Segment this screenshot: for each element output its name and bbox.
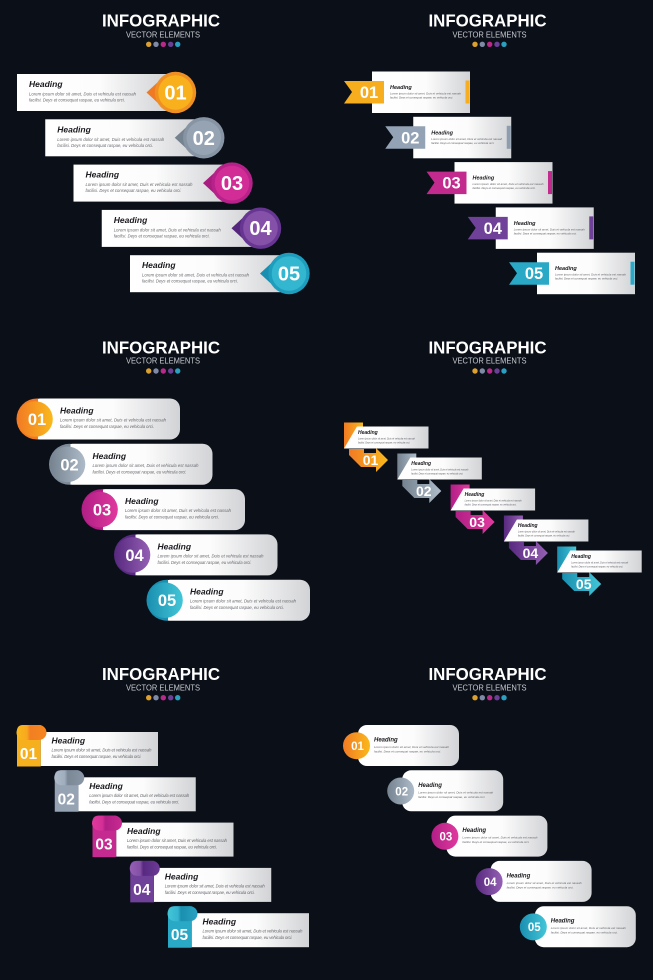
row 05: facilisi. Deys et consequat raspae, eu vehicula orci.	[555, 277, 618, 281]
row 05: 05	[576, 576, 592, 592]
row 04: Lorem ipsum dolor sit amet, Duis et vehicula est nassah	[518, 530, 576, 534]
row 02: facilisi. Deys et consequat raspae, eu vehicula orci.	[89, 799, 179, 804]
row 02: facilisi. Deys et consequat raspae, eu vehicula orci.	[411, 472, 464, 476]
panel 5 title: VECTOR ELEMENTS	[126, 682, 200, 692]
row 04: facilisi. Deys et consequat raspae, eu vehicula orci.	[518, 534, 570, 538]
row 03: facilisi. Deys et consequat raspae, eu vehicula orci.	[472, 186, 536, 190]
row 02: Lorem ipsum dolor sit amet, Duis et vehicula est nassah	[418, 790, 494, 794]
row 04	[468, 207, 594, 249]
row 03	[451, 484, 535, 534]
row 02: Heading	[89, 781, 124, 791]
row 03: facilisi. Deys et consequat raspae, eu vehicula orci.	[125, 515, 219, 520]
row 01	[17, 72, 196, 113]
row 04: 04	[523, 545, 538, 561]
row 02: facilisi. Deys et consequat raspae, eu vehicula orci.	[92, 469, 186, 474]
row 05: Heading	[551, 919, 575, 925]
row 01: Heading	[358, 430, 378, 436]
row 04: Lorem ipsum dolor sit amet, Duis et vehicula est nassah	[165, 883, 265, 888]
row 01: facilisi. Deys et consequat raspae, eu vehicula orci.	[52, 754, 142, 759]
row 05: Lorem ipsum dolor sit amet, Duis et vehicula est nassah	[571, 562, 629, 564]
row 01: Heading	[52, 736, 86, 746]
row 01: facilisi. Deys et consequat raspae, eu vehicula orci.	[29, 98, 125, 102]
row 02: 02	[416, 483, 432, 499]
row 01: Heading	[390, 85, 412, 91]
row 02: Lorem ipsum dolor sit amet, Duis et vehicula est nassah	[89, 793, 190, 798]
row 04	[102, 208, 281, 249]
panel 4: arrow list	[344, 337, 642, 596]
panel 1: teardrop list	[17, 11, 310, 294]
row 01: Lorem ipsum dolor sit amet, Duis et vehicula est nassah	[358, 438, 416, 440]
row 01: Heading	[29, 79, 63, 89]
row 05: Lorem ipsum dolor sit amet, Duis et vehicula est nassah	[190, 599, 297, 604]
row 02: Heading	[431, 130, 454, 136]
row 03	[82, 489, 245, 530]
row 02	[45, 117, 224, 158]
panel 6: rounded card list	[343, 664, 636, 947]
row 01: 01	[360, 84, 378, 102]
row 01: facilisi. Deys et consequat raspae, eu vehicula orci.	[60, 424, 154, 429]
row 04: Lorem ipsum dolor sit amet, Duis et vehicula est nassah	[514, 227, 585, 231]
row 05: Lorem ipsum dolor sit amet, Duis et vehicula est nassah	[555, 273, 626, 277]
row 05: facilisi. Deys et consequat raspae, eu vehicula orci.	[571, 566, 624, 568]
panel 4 title: INFOGRAPHIC	[428, 337, 547, 357]
row 03	[431, 816, 547, 857]
row 03: Lorem ipsum dolor sit amet, Duis et vehicula est nassah	[127, 838, 228, 843]
panel 1 title: INFOGRAPHIC	[102, 11, 220, 31]
row 03: Lorem ipsum dolor sit amet, Duis et vehicula est nassah	[462, 836, 538, 840]
row 04: facilisi. Deys et consequat raspae, eu vehicula orci.	[158, 560, 252, 565]
panel 3 title: VECTOR ELEMENTS	[126, 356, 200, 366]
row 04: facilisi. Deys et consequat raspae, eu vehicula orci.	[165, 890, 255, 895]
row 01: Lorem ipsum dolor sit amet, Duis et vehicula est nassah	[374, 745, 449, 749]
row 03: Heading	[462, 828, 486, 834]
row 05: 05	[278, 264, 300, 286]
row 03: Lorem ipsum dolor sit amet, Duis et vehicula est nassah	[465, 500, 522, 502]
row 01	[344, 422, 428, 472]
row 03: 03	[440, 832, 452, 844]
row 01: facilisi. Deys et consequat raspae, eu vehicula orci.	[374, 750, 441, 754]
row 05: facilisi. Deys et consequat raspae, eu vehicula orci.	[142, 279, 238, 284]
row 03: Lorem ipsum dolor sit amet, Duis et vehicula est nassah	[86, 182, 193, 187]
row 03: 03	[442, 175, 461, 193]
row 01: facilisi. Deys et consequat raspae, eu vehicula orci.	[358, 442, 410, 444]
row 05: Heading	[202, 917, 237, 927]
panel 2 title	[428, 11, 547, 47]
row 03: Heading	[472, 176, 495, 182]
panel 4 title	[428, 337, 547, 374]
row 02: 02	[60, 456, 79, 474]
row 05: Heading	[190, 587, 224, 597]
panel 3 title	[102, 337, 220, 374]
row 03: Heading	[86, 170, 120, 180]
row 01: Lorem ipsum dolor sit amet, Duis et vehicula est nassah	[390, 92, 461, 96]
row 05	[520, 906, 636, 947]
panel 2 title: INFOGRAPHIC	[428, 11, 547, 31]
row 01: Lorem ipsum dolor sit amet, Duis et vehicula est nassah	[52, 748, 152, 752]
row 03: facilisi. Deys et consequat raspae, eu vehicula orci.	[127, 845, 217, 850]
row 01: Lorem ipsum dolor sit amet, Duis et vehicula est nassah	[29, 92, 137, 96]
row 03: Heading	[125, 496, 159, 506]
row 01: 01	[20, 746, 37, 763]
row 03: 03	[93, 502, 111, 520]
row 04: Heading	[158, 541, 192, 551]
row 01	[344, 72, 470, 113]
row 04	[476, 861, 592, 902]
row 05	[509, 253, 635, 294]
panel 5 title: INFOGRAPHIC	[102, 664, 220, 684]
row 01	[16, 398, 180, 440]
row 03: facilisi. Deys et consequat raspae, eu vehicula orci.	[462, 840, 530, 844]
row 04: 04	[133, 882, 151, 899]
row 05: Heading	[571, 554, 591, 560]
row 03: facilisi. Deys et consequat raspae, eu vehicula orci.	[465, 504, 517, 506]
row 03	[92, 816, 234, 857]
row 02: Heading	[57, 124, 92, 134]
row 05: facilisi. Deys et consequat raspae, eu vehicula orci.	[551, 931, 618, 935]
row 04	[504, 516, 588, 565]
row 05: Lorem ipsum dolor sit amet, Duis et vehicula est nassah	[142, 273, 250, 278]
row 01: Heading	[60, 406, 94, 416]
row 05	[146, 580, 310, 621]
row 05: 05	[528, 922, 541, 934]
panel 6 title	[428, 664, 547, 700]
row 04: 04	[484, 877, 497, 889]
row 02: facilisi. Deys et consequat raspae, eu vehicula orci.	[57, 143, 153, 148]
panel 2: ribbon list	[344, 11, 635, 294]
row 04: Lorem ipsum dolor sit amet, Duis et vehicula est nassah	[114, 227, 221, 232]
panel 4 title: VECTOR ELEMENTS	[452, 356, 527, 366]
row 05: Heading	[142, 260, 176, 270]
row 04: facilisi. Deys et consequat raspae, eu vehicula orci.	[507, 885, 574, 889]
row 05	[168, 906, 309, 948]
row 02	[54, 770, 196, 812]
row 02: facilisi. Deys et consequat raspae, eu vehicula orci.	[431, 141, 494, 145]
row 04: 04	[125, 547, 144, 565]
row 04: Heading	[514, 221, 536, 227]
row 02: Lorem ipsum dolor sit amet, Duis et vehicula est nassah	[411, 468, 469, 472]
row 02	[385, 117, 511, 158]
row 01: 01	[351, 741, 364, 753]
row 03: Heading	[127, 826, 161, 836]
row 02: Lorem ipsum dolor sit amet, Duis et vehicula est nassah	[431, 137, 503, 141]
row 03: 03	[469, 514, 485, 530]
row 05: 05	[525, 265, 543, 283]
row 02: 02	[58, 791, 75, 808]
row 05: facilisi. Deys et consequat raspae, eu vehicula orci.	[202, 935, 292, 940]
panel 3 title: INFOGRAPHIC	[102, 337, 220, 357]
row 01: 01	[363, 452, 378, 468]
row 02	[387, 770, 503, 811]
row 04: Heading	[114, 215, 148, 225]
row 04: facilisi. Deys et consequat raspae, eu vehicula orci.	[114, 233, 210, 238]
panel 2 title: VECTOR ELEMENTS	[452, 29, 527, 39]
row 02: Heading	[92, 451, 127, 461]
row 01	[343, 725, 459, 766]
row 02: 02	[395, 786, 408, 798]
row 05: 05	[171, 927, 188, 944]
row 04: Lorem ipsum dolor sit amet, Duis et vehicula est nassah	[507, 881, 582, 885]
row 02: facilisi. Deys et consequat raspae, eu vehicula orci.	[418, 795, 485, 799]
row 05	[557, 546, 642, 596]
row 04: facilisi. Deys et consequat raspae, eu vehicula orci.	[514, 231, 577, 235]
panel 1 title	[102, 11, 220, 47]
row 01	[17, 725, 158, 766]
row 04	[114, 534, 278, 575]
row 04: 04	[249, 218, 272, 240]
row 04: Heading	[165, 871, 199, 881]
row 03: 03	[221, 173, 243, 195]
row 03	[74, 162, 253, 204]
row 02: 02	[193, 128, 215, 150]
row 03	[426, 162, 552, 204]
row 02: 02	[401, 129, 419, 147]
row 02	[397, 454, 482, 503]
row 04	[130, 861, 271, 902]
row 05: 05	[158, 592, 176, 610]
row 01: facilisi. Deys et consequat raspae, eu vehicula orci.	[390, 96, 453, 100]
row 02	[49, 444, 212, 485]
panel 6 title: INFOGRAPHIC	[428, 664, 547, 684]
panel 3: pill list	[16, 337, 310, 621]
row 05: facilisi. Deys et consequat raspae, eu vehicula orci.	[190, 605, 284, 610]
row 04: 04	[484, 220, 503, 238]
row 03: Lorem ipsum dolor sit amet, Duis et vehicula est nassah	[472, 182, 544, 186]
row 05	[130, 253, 310, 294]
row 01: 01	[28, 411, 46, 429]
row 02: Heading	[411, 461, 431, 467]
row 05: Lorem ipsum dolor sit amet, Duis et vehicula est nassah	[551, 926, 626, 930]
row 04: Heading	[518, 523, 538, 529]
row 03: Heading	[465, 492, 484, 498]
panel 6 title: VECTOR ELEMENTS	[452, 682, 527, 692]
row 05: Heading	[555, 266, 577, 272]
row 01: Heading	[374, 738, 398, 744]
row 05: Lorem ipsum dolor sit amet, Duis et vehicula est nassah	[202, 929, 303, 934]
row 02: Heading	[418, 783, 442, 789]
panel 1 title: VECTOR ELEMENTS	[126, 29, 200, 39]
row 03: Lorem ipsum dolor sit amet, Duis et vehicula est nassah	[125, 508, 232, 513]
row 01: 01	[164, 82, 187, 104]
panel 5 title	[102, 664, 220, 700]
row 01: Lorem ipsum dolor sit amet, Duis et vehicula est nassah	[60, 418, 167, 422]
row 04: Lorem ipsum dolor sit amet, Duis et vehicula est nassah	[158, 553, 264, 558]
panel 5: scroll tab list	[17, 664, 309, 948]
row 03: facilisi. Deys et consequat raspae, eu vehicula orci.	[86, 188, 182, 193]
row 02: Lorem ipsum dolor sit amet, Duis et vehicula est nassah	[57, 137, 165, 142]
row 03: 03	[95, 837, 113, 854]
row 02: Lorem ipsum dolor sit amet, Duis et vehicula est nassah	[92, 463, 199, 468]
row 04: Heading	[507, 873, 531, 879]
